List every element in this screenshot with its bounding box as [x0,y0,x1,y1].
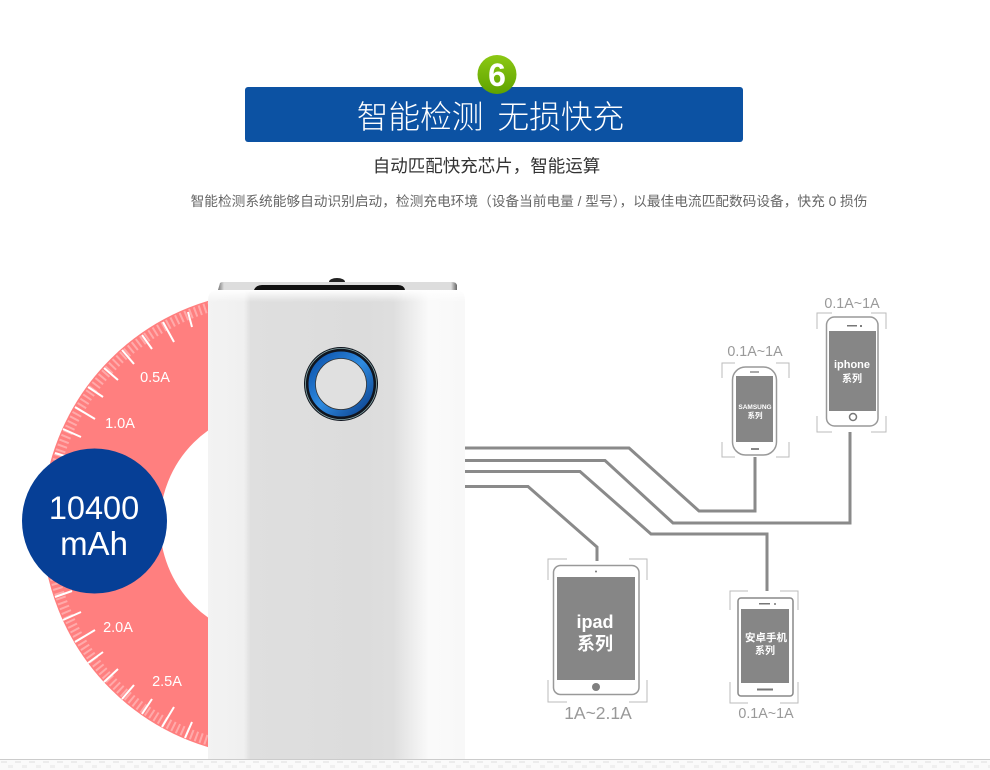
gauge major ticks [55,312,192,738]
device: iPad: ipad [576,612,614,632]
metal top edge [218,282,457,290]
description text: 智能检测系统能够自动识别启动，检测充电环境（设备当前电量 / 型号），以最佳电流匹配数码设备，快充 0 损伤 [191,193,867,209]
device: SAMSUNG: SAMSUNG [738,404,772,411]
device: SAMSUNG [722,363,789,457]
label: iPad current: 1A~2.1A [564,703,632,723]
blue power ring [304,347,378,421]
capacity circle: 10400 [49,490,139,526]
black port strip [254,285,405,290]
device: iPhone: iphone [834,359,870,371]
title banner [245,87,743,142]
device: SAMSUNG: 系列 [748,410,763,420]
device body [208,290,465,759]
capacity circle [22,448,167,594]
title banner: 智能检测 无损快充 [357,92,624,138]
device: Android [730,591,798,703]
gauge minor ticks [50,302,208,745]
section number badge: 6 [488,57,506,93]
gauge label 2.5A: 2.5A [152,674,182,690]
device: iPad: 系列 [577,633,613,654]
connection wires [465,432,850,591]
subtitle: 自动匹配快充芯片，智能运算 [373,156,600,176]
device: Android: 安卓手机 [745,631,787,644]
capacity circle: mAh [60,525,128,562]
label: iPhone current: 0.1A~1A [824,296,880,312]
device: Android: 系列 [755,644,775,657]
device: iPhone: 系列 [842,372,862,385]
device: iPhone [817,313,886,432]
gauge label 0.5A: 0.5A [140,370,170,386]
power button nub [329,278,345,286]
label: Android current: 0.1A~1A [738,706,794,722]
gauge label 1.0A: 1.0A [105,416,135,432]
device: iPad [548,559,647,702]
power bank [208,278,465,759]
section number badge [478,55,516,94]
label: SAMSUNG current: 0.1A~1A [727,344,783,360]
gauge label 2.0A: 2.0A [103,620,133,636]
current gauge ring [48,300,208,748]
